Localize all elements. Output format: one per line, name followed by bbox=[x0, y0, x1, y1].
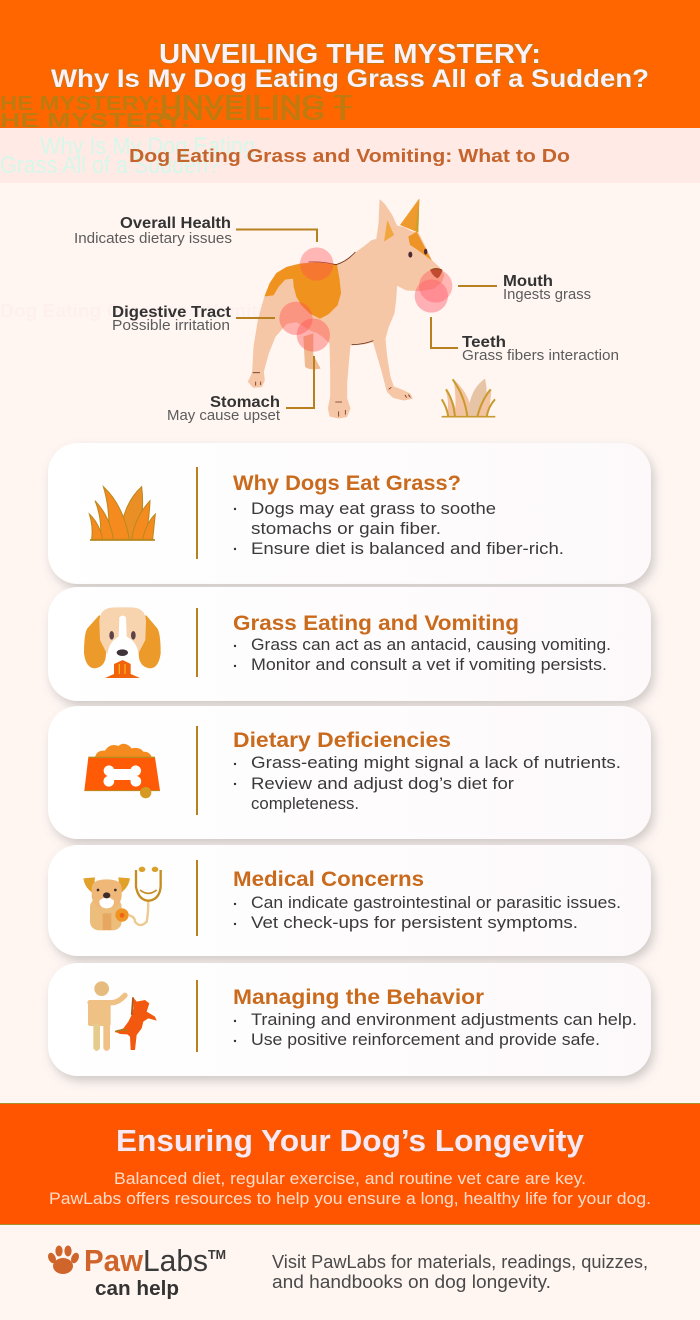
PawLabs logo: Labs bbox=[143, 1243, 208, 1278]
callout: mouth: Ingests grass bbox=[503, 286, 591, 303]
callout: teeth: Teeth bbox=[462, 334, 506, 351]
panel: dietary deficiencies bbox=[48, 706, 651, 839]
saddle marking bbox=[265, 263, 341, 318]
callout: stomach bbox=[167, 356, 314, 424]
header ghost text: HE MYSTERY: bbox=[0, 93, 160, 115]
strip ghost text bbox=[0, 133, 255, 179]
callout: mouth bbox=[458, 273, 591, 303]
bullet text: Review and adjust dog’s diet for bbox=[251, 774, 514, 793]
icon: dog face with grass bbox=[84, 607, 161, 678]
small grass illustration bbox=[442, 379, 495, 417]
eyes and nose bbox=[408, 252, 412, 258]
callout: digestive tract bbox=[112, 304, 275, 334]
callout: overall health bbox=[74, 215, 317, 247]
callout: digestive tract: Digestive Tract bbox=[112, 304, 232, 321]
bullet text bbox=[234, 893, 621, 932]
icon: grass tuft bbox=[89, 487, 155, 540]
far hind leg bbox=[303, 333, 321, 369]
PawLabs logo bbox=[46, 1243, 226, 1300]
back and belly lines bbox=[308, 252, 355, 265]
heading: Medical Concerns bbox=[233, 868, 424, 891]
subtitle: Dog Eating Grass and Vomiting: What to Do bbox=[129, 145, 570, 166]
callout: teeth: Grass fibers interaction bbox=[462, 347, 619, 364]
icon: paw bbox=[46, 1246, 81, 1274]
PawLabs logo: can help bbox=[95, 1278, 179, 1300]
bullet text: completeness. bbox=[251, 794, 359, 813]
callout: digestive tract: Possible irritation bbox=[112, 317, 230, 334]
faint ghost text behind illustration: Dog Eating Grass and Vomiting: What bbox=[0, 301, 345, 321]
callout: teeth bbox=[431, 317, 619, 364]
panel: why dogs eat grass bbox=[48, 443, 651, 584]
heading: Grass Eating and Vomiting bbox=[233, 612, 519, 635]
PawLabs logo: Paw bbox=[84, 1243, 144, 1278]
banner text: Balanced diet, regular exercise, and routine vet care are key. bbox=[114, 1170, 586, 1188]
bullet text: Ensure diet is balanced and fiber-rich. bbox=[251, 539, 564, 558]
bullet text: Vet check-ups for persistent symptoms. bbox=[251, 913, 578, 932]
bullet text: Training and environment adjustments can help. bbox=[251, 1010, 637, 1029]
title line 1: UNVEILING THE MYSTERY: bbox=[159, 38, 541, 69]
heading: Dietary Deficiencies bbox=[233, 729, 451, 752]
bullet text: Grass can act as an antacid, causing vomiting. bbox=[251, 635, 611, 654]
bullet text: Dogs may eat grass to soothe bbox=[251, 499, 496, 518]
bullet text: Use positive reinforcement and provide safe. bbox=[251, 1030, 600, 1049]
bullet text bbox=[234, 1010, 637, 1049]
panel: grass eating and vomiting bbox=[48, 587, 651, 701]
footer text bbox=[272, 1251, 648, 1292]
banner text bbox=[49, 1170, 651, 1208]
left ear inner bbox=[384, 220, 394, 242]
dog anatomy illustration bbox=[248, 198, 452, 418]
banner text: PawLabs offers resources to help you ensure a long, healthy life for your dog. bbox=[49, 1190, 651, 1208]
callout: stomach: Stomach bbox=[210, 394, 280, 411]
callout: stomach: May cause upset bbox=[167, 407, 281, 424]
strip ghost text: Grass All of a Sudden? bbox=[0, 152, 220, 179]
footer text: Visit PawLabs for materials, readings, quizzes, bbox=[272, 1251, 648, 1272]
bullet text: Monitor and consult a vet if vomiting persists. bbox=[251, 655, 607, 674]
toes bbox=[253, 373, 410, 417]
header ghost text bbox=[0, 92, 352, 132]
subtitle strip bbox=[0, 128, 700, 183]
bullet text: Grass-eating might signal a lack of nutrients. bbox=[251, 753, 621, 772]
panel: managing the behavior bbox=[48, 963, 651, 1076]
longevity banner bbox=[0, 1103, 700, 1225]
title line 2: Why Is My Dog Eating Grass All of a Sudden? bbox=[51, 65, 649, 93]
bullet text: Can indicate gastrointestinal or parasitic issues. bbox=[251, 893, 621, 912]
bullet text: stomachs or gain fiber. bbox=[251, 519, 441, 538]
callout: mouth: Mouth bbox=[503, 273, 553, 290]
header band bbox=[0, 0, 700, 132]
banner heading: Ensuring Your Dog’s Longevity bbox=[116, 1123, 585, 1158]
icon: person training dog bbox=[88, 981, 157, 1051]
callout: overall health: Overall Health bbox=[120, 215, 231, 232]
right ear bbox=[400, 198, 419, 233]
head patch bbox=[408, 232, 432, 261]
footer text: and handbooks on dog longevity. bbox=[272, 1271, 551, 1292]
callout: overall health: Indicates dietary issues bbox=[74, 230, 232, 247]
highlight circles bbox=[300, 247, 333, 281]
bullet text bbox=[234, 635, 611, 674]
heading: Why Dogs Eat Grass? bbox=[233, 472, 461, 495]
bullet text bbox=[234, 499, 564, 558]
bullet text bbox=[234, 753, 621, 813]
header ghost text: UNVEILING T bbox=[160, 92, 352, 114]
heading: Managing the Behavior bbox=[233, 986, 484, 1009]
icon: dog with stethoscope bbox=[83, 867, 161, 930]
panel: medical concerns bbox=[48, 845, 651, 956]
header ghost text: HE MYSTERY: bbox=[0, 110, 190, 132]
PawLabs logo: TM bbox=[208, 1247, 226, 1262]
icon: food bowl with bone bbox=[84, 744, 160, 798]
header ghost text: UNVEILING T bbox=[160, 103, 352, 125]
strip ghost text: Why Is My Dog Eating bbox=[40, 133, 255, 160]
dog body bbox=[248, 200, 444, 418]
